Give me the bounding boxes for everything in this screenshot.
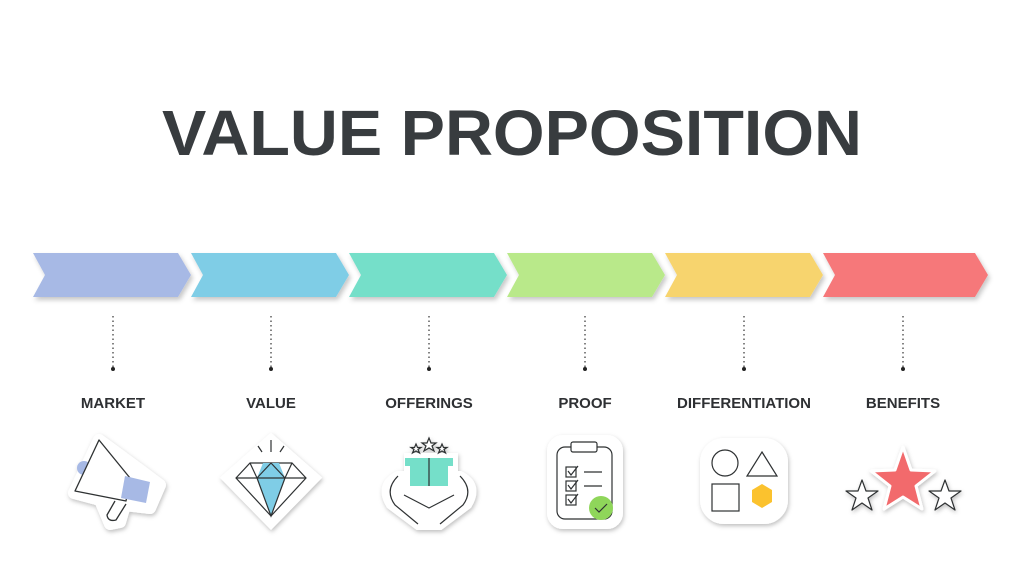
labels [81, 395, 940, 412]
icon: gift box in hands [386, 438, 472, 526]
arrow: market [33, 253, 191, 297]
icon: stars [846, 447, 961, 510]
labels: BENEFITS [866, 395, 940, 412]
arrow: value [191, 253, 349, 297]
labels: MARKET [81, 395, 145, 412]
connectors [113, 316, 903, 369]
labels: PROOF [558, 395, 612, 412]
icon: megaphone [74, 440, 160, 524]
labels: VALUE [246, 395, 296, 412]
icon: shapes [702, 440, 786, 522]
icon: clipboard [549, 437, 621, 527]
arrow: offerings [349, 253, 507, 297]
icon: diamond [230, 440, 312, 520]
arrow chain [33, 253, 988, 297]
labels: OFFERINGS [385, 395, 473, 412]
labels: DIFFERENTIATION [677, 395, 811, 412]
arrow: proof [507, 253, 665, 297]
arrow: benefits [823, 253, 988, 297]
title: VALUE PROPOSITION [162, 97, 862, 169]
arrow: differentiation [665, 253, 823, 297]
